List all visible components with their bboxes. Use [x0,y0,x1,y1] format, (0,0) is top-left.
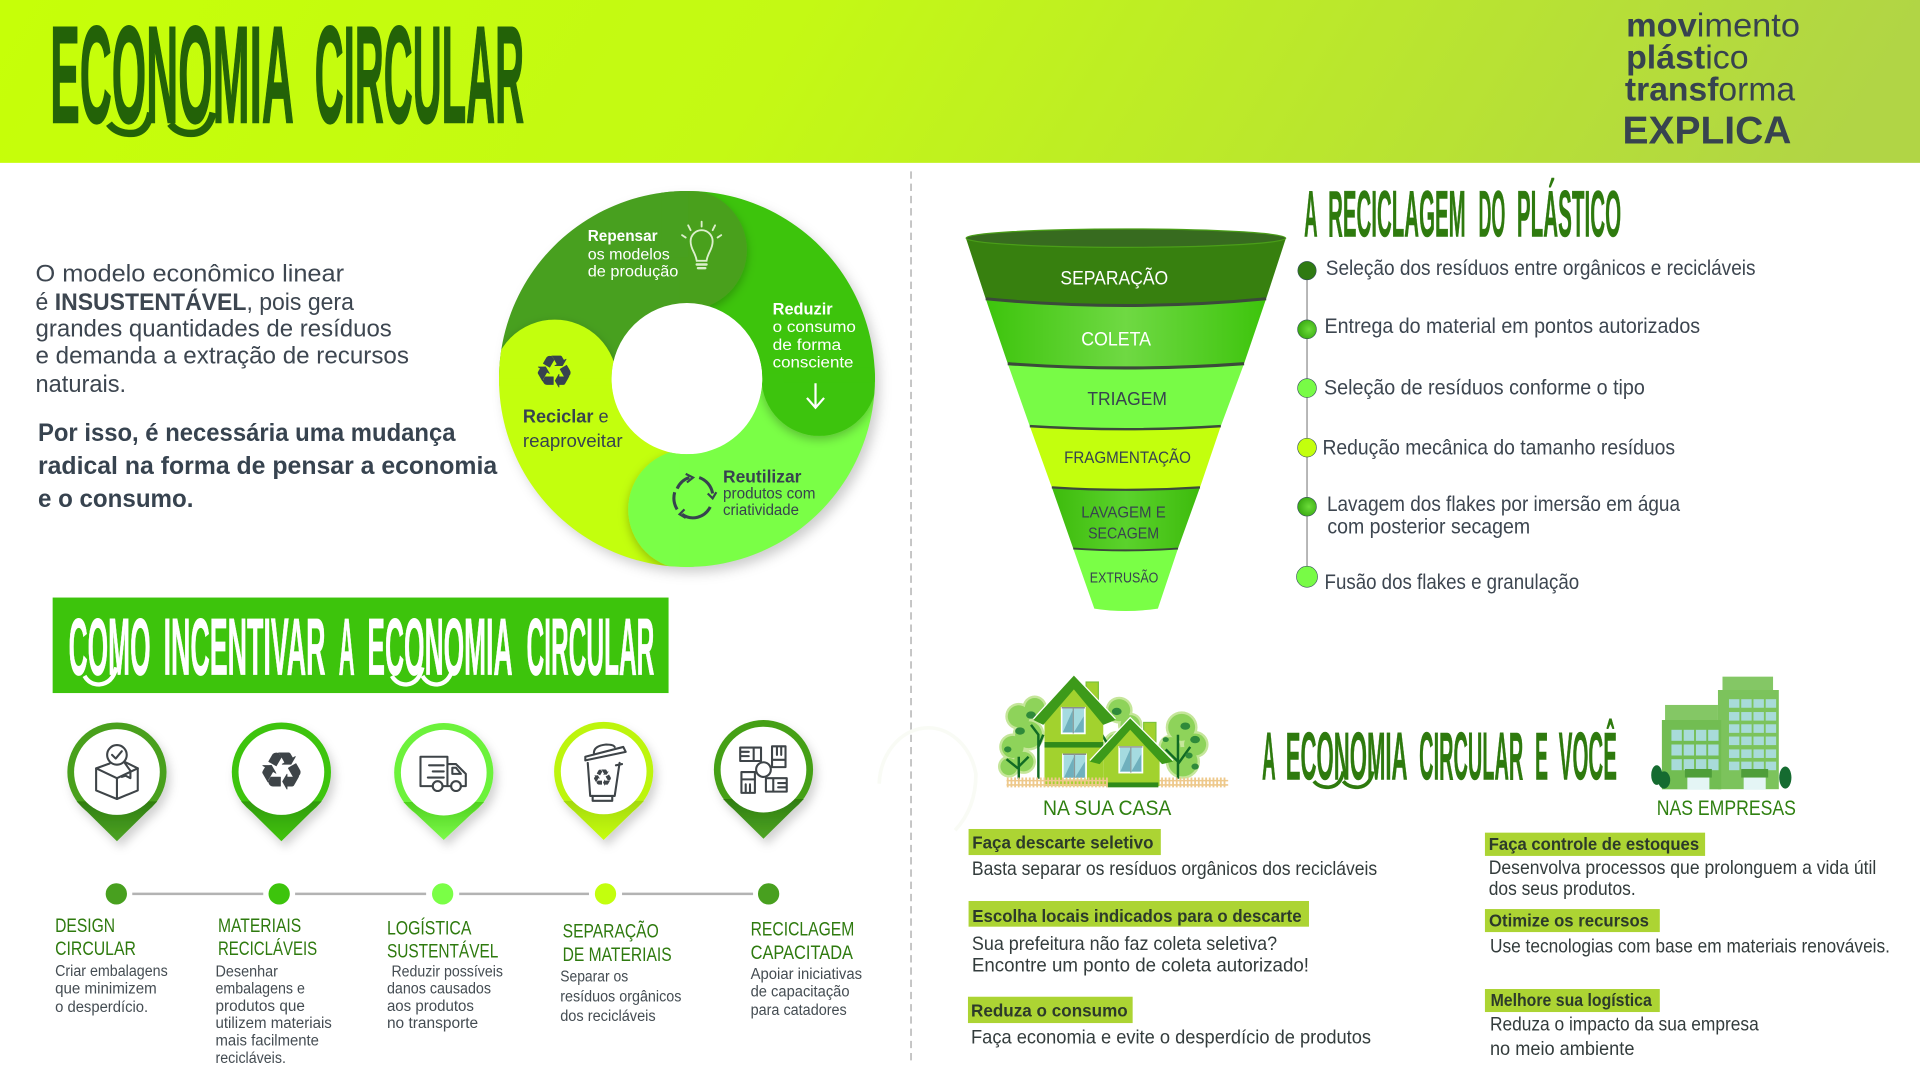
segment: reciclar: reaproveitar [523,430,623,451]
column: design circular: Criar embalagens [55,963,168,980]
column: reciclagem capacitada [751,920,862,1019]
icon: recycle: ♻ [534,347,574,398]
column: design circular: DESIGN [55,916,115,937]
band: lavagem e secagem: SECAGEM [1088,525,1159,542]
pin: reciclagem capacitada [714,720,813,839]
segment: reduzir: de forma [773,337,841,354]
segment: repensar: de produção [588,264,679,281]
tip: reduza o consumo: Reduza o consumo [971,1000,1128,1020]
banner heading: ECONOMIA [367,603,513,693]
heading: a economia circular e você: A [1262,719,1276,794]
band: extrusão: EXTRUSÃO [1090,569,1158,586]
pin: design circular [67,722,167,841]
pin: materiais recicláveis [232,722,331,841]
tip: controle de estoques: dos seus produtos. [1489,878,1636,900]
tip: reduza o consumo [968,997,1371,1048]
tip: locais para descarte: Sua prefeitura não faz coleta seletiva? [972,933,1277,955]
segment: reduzir [773,300,856,408]
segment: reduzir: o consumo [773,319,856,336]
intro text: grandes quantidades de resíduos [36,316,392,343]
heading: a economia circular e você: ECONOMIA [1286,719,1408,794]
column: materiais recicláveis: utilizem materiais [216,1015,332,1032]
band: triagem: TRIAGEM [1087,388,1167,409]
icon: recycle: ♻ [258,742,304,802]
band: separação: SEPARAÇÃO [1060,268,1168,290]
heading: a economia circular e você: CIRCULAR [1419,719,1523,794]
column: logística sustentável: Reduzir possíveis [391,964,503,981]
column: reciclagem capacitada: RECICLAGEM [751,920,854,941]
column: separação de materiais: DE MATERIAIS [563,945,672,966]
recycling steps list: com posterior secagem [1327,514,1530,538]
segment: repensar: os modelos [588,247,670,264]
segment: reduzir: consciente [773,354,854,371]
recycling steps list: Seleção de resíduos conforme o tipo [1324,375,1645,399]
tip: otimize recursos [1485,909,1890,958]
tip: descarte seletivo: Faça descarte seletivo [972,833,1154,853]
segment: reutilizar: criatividade [723,502,799,519]
band: fragmentação [1030,426,1221,490]
recycling steps list: Fusão dos flakes e granulação [1325,570,1579,594]
heading: a reciclagem do plástico: RECICLAGEM [1328,178,1466,252]
column: logística sustentável: danos causados [387,981,491,998]
header band [0,0,1920,163]
title: ECONOMIA [50,0,294,152]
intro text: e demanda a extração de recursos [36,343,409,370]
funnel [966,229,1286,611]
heading: a economia circular e você: E [1535,719,1548,794]
tip: melhore logística: no meio ambiente [1490,1038,1635,1060]
column: separação de materiais: resíduos orgânicos [560,989,681,1006]
tip: melhore logística [1485,989,1759,1060]
tip: locais para descarte: Escolha locais indicados para o descarte [972,906,1302,926]
column: separação de materiais: SEPARAÇÃO [563,920,659,942]
icon: truck [420,757,466,791]
icon: recycling bin [585,744,626,801]
recycling steps list [1296,256,1756,594]
segment: reutilizar: produtos com [723,485,816,502]
circular diagram [490,184,883,576]
column: materiais recicláveis: Desenhar [216,964,279,981]
column: design circular: CIRCULAR [55,939,136,960]
text: PLÁSTICO [1517,177,1621,252]
column: materiais recicláveis: produtos que [216,998,305,1015]
column: design circular [55,916,168,1016]
banner heading: INCENTIVAR [164,603,325,693]
column: design circular: o desperdício. [55,999,148,1016]
logo: transforma [1625,71,1796,108]
column: logística sustentável: LOGÍSTICA [387,918,472,939]
band: lavagem e secagem: LAVAGEM E [1081,504,1166,521]
tip: controle de estoques: Faça controle de estoques [1489,834,1699,854]
pin: separação de materiais: ♻ [592,765,613,792]
emphasis text [38,419,498,513]
banner heading: COMO [69,603,151,693]
band: triagem [1008,364,1244,429]
title [50,0,524,152]
tip: otimize recursos: Otimize os recursos [1489,911,1649,931]
recycling steps list: Entrega do material em pontos autorizados [1325,314,1700,338]
text: CIRCULAR [527,603,654,693]
tip: reduza o consumo: Faça economia e evite o desperdício de produtos [971,1026,1371,1048]
heading: a reciclagem do plástico [1304,177,1621,252]
recycling steps list: Lavagem dos flakes por imersão em água [1327,492,1680,516]
column: materiais recicláveis: mais facilmente [216,1033,319,1050]
column: design circular: que minimizem [55,981,157,998]
logo: movimento [1626,8,1800,45]
label: na sua casa: NA SUA CASA [1043,797,1171,820]
timeline [106,883,779,905]
recycling steps list: Seleção dos resíduos entre orgânicos e recicláveis [1326,256,1756,280]
column: reciclagem capacitada: para catadores [751,1002,847,1019]
tip: locais para descarte [969,901,1309,977]
column: logística sustentável: aos produtos [387,998,474,1015]
pin: separação de materiais [554,722,653,840]
windows [1062,708,1142,779]
column: reciclagem capacitada: Apoiar iniciativas [751,966,862,983]
tower windows [1671,699,1776,770]
intro text: naturais. [36,371,126,398]
tip: melhore logística: Reduza o impacto da sua empresa [1490,1014,1759,1036]
segment: reutilizar [674,466,816,519]
emphasis text: e o consumo. [38,485,193,513]
column: materiais recicláveis: recicláveis. [216,1050,286,1067]
segment: reduzir: Reduzir [773,300,833,319]
band: coleta: COLETA [1081,330,1151,351]
icon: down arrow [807,383,824,408]
segment: reutilizar: Reutilizar [723,466,802,486]
column: separação de materiais: dos recicláveis [560,1008,656,1025]
column: logística sustentável: SUSTENTÁVEL [387,942,498,963]
column: logística sustentável: no transporte [387,1015,478,1032]
column: materiais recicláveis: RECICLÁVEIS [218,939,317,960]
intro text: é INSUSTENTÁVEL, pois gera [36,288,354,316]
column: materiais recicláveis: embalagens e [216,981,305,998]
intro text: O modelo econômico linear [36,261,344,288]
tip: controle de estoques: Desenvolva processos que prolonguem a vida útil [1489,857,1876,879]
fence [1007,778,1228,787]
icon: joined hands [740,746,787,793]
column: materiais recicláveis: MATERIAIS [218,916,301,937]
pin: logística sustentável [394,723,493,840]
tip: descarte seletivo: Basta separar os resíduos orgânicos dos recicláveis [972,858,1377,880]
column: logística sustentável [387,918,503,1032]
emphasis text: Por isso, é necessária uma mudança [38,419,456,447]
header band: CIRCULAR [315,0,524,152]
column: reciclagem capacitada: CAPACITADA [751,943,853,964]
label: nas empresas: NAS EMPRESAS [1657,797,1796,820]
column: reciclagem capacitada: de capacitação [751,984,850,1001]
tip: descarte seletivo [969,829,1377,880]
segment: reciclar [523,347,623,451]
banner heading: A [339,603,355,693]
column: separação de materiais [560,920,681,1025]
icon: cycle arrows [674,474,716,518]
logo: EXPLICA [1622,109,1791,152]
segment: reciclar: Reciclar e [523,405,609,426]
illustration: house [998,675,1228,787]
band: separação [966,229,1286,306]
icon: light bulb [682,222,721,268]
tip: melhore logística: Melhore sua logística [1491,990,1652,1010]
tip: locais para descarte: Encontre um ponto de coleta autorizado! [972,955,1309,977]
heading: a reciclagem do plástico: DO [1478,178,1505,252]
segment: repensar: Repensar [588,228,658,245]
segment: repensar [588,222,721,281]
illustration: buildings [1651,677,1791,790]
logo: plástico [1626,40,1749,77]
band: coleta [986,299,1266,368]
heading: a reciclagem do plástico: A [1304,178,1318,252]
column: materiais recicláveis [216,916,332,1067]
tip: controle de estoques [1485,833,1876,900]
emphasis text: radical na forma de pensar a economia [38,452,498,480]
band: lavagem e secagem [1052,487,1200,550]
icon: box with check [96,745,138,799]
band: extrusão [1073,549,1178,611]
band: fragmentação: FRAGMENTAÇÃO [1064,448,1191,467]
column: separação de materiais: Separar os [560,969,628,986]
intro text [36,261,409,398]
recycling steps list: Redução mecânica do tamanho resíduos [1322,435,1675,459]
tree foliage [998,696,1209,779]
logo [1622,8,1800,152]
text: VOCÊ [1559,719,1617,794]
